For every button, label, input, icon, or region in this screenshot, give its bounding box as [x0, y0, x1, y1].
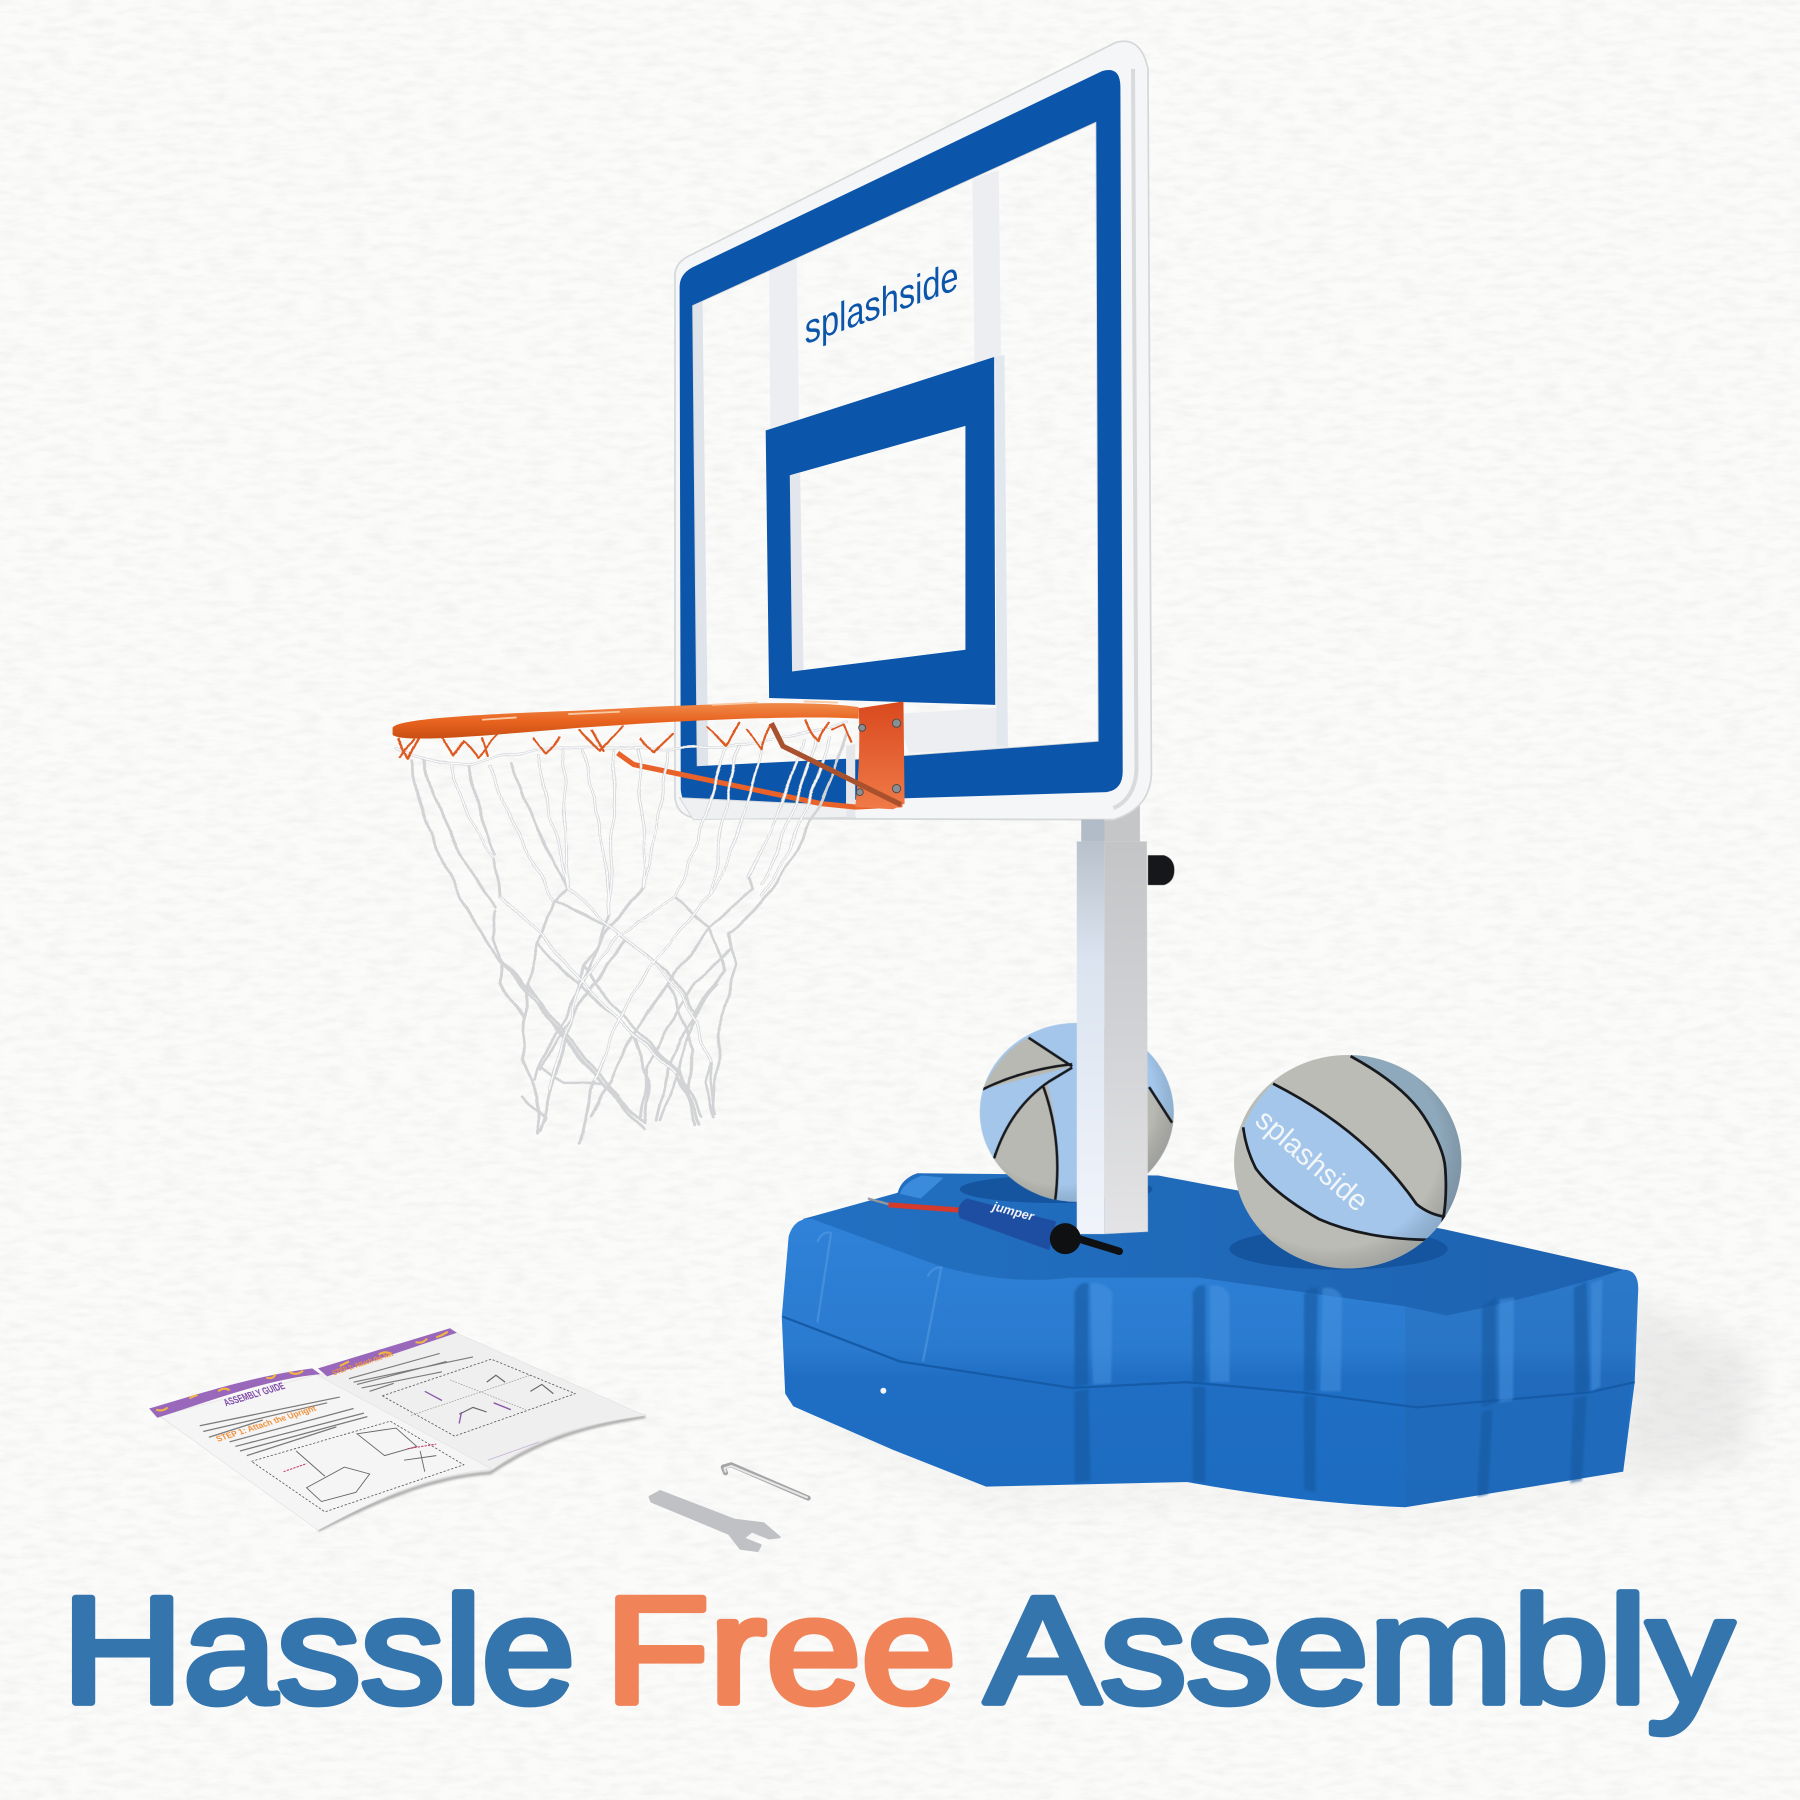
pump needle — [868, 1198, 889, 1204]
title word: Assembly: Assembly — [985, 1566, 1734, 1735]
adjustment knob — [1148, 855, 1174, 885]
pump barrel — [958, 1198, 1056, 1250]
right page diagrams — [382, 1359, 575, 1436]
water tank base — [782, 1173, 1638, 1507]
ball holes — [960, 1176, 1153, 1203]
air pump — [868, 1198, 1119, 1254]
ball side panel — [1352, 1055, 1462, 1218]
base front body — [782, 1219, 1638, 1507]
hoop rim — [393, 701, 859, 739]
title word: Hassle: Hassle — [62, 1566, 575, 1735]
band squiggles — [156, 1332, 448, 1410]
support pole — [1077, 820, 1174, 1234]
pole tube shade — [1081, 820, 1104, 841]
ball seams — [983, 1038, 1172, 1202]
wrench tool — [650, 1491, 779, 1551]
back corner highlight — [900, 1176, 944, 1198]
bracket bolts — [856, 719, 901, 796]
left page — [149, 1374, 492, 1530]
front basketball — [1228, 1050, 1469, 1274]
purple band — [149, 1328, 457, 1418]
right page text lines — [349, 1353, 473, 1391]
base ribs light — [1091, 1279, 1603, 1403]
lower brace — [618, 753, 902, 807]
base top surface — [802, 1173, 1637, 1332]
back basketball — [980, 1022, 1174, 1202]
net strings highlight — [396, 722, 847, 1090]
title word: Free: Free — [605, 1566, 956, 1735]
backboard — [675, 41, 1151, 820]
net hooks — [398, 722, 851, 758]
step diagram — [251, 1421, 464, 1512]
backboard frame highlight — [1114, 69, 1136, 808]
ball seams — [1243, 1056, 1446, 1250]
ball logo: splashside — [1249, 1103, 1375, 1218]
upper brace — [771, 723, 901, 805]
pump handle — [1050, 1223, 1081, 1254]
pole right face — [1104, 841, 1148, 1234]
assembly booklet — [149, 1328, 645, 1530]
lower plate behind hoop — [680, 744, 855, 820]
base seam — [783, 1317, 1635, 1407]
blue target square — [766, 357, 995, 705]
left ribs — [817, 1233, 941, 1361]
hoop bracket — [855, 701, 905, 809]
base shadow — [804, 1297, 1756, 1515]
pole left face — [1077, 841, 1104, 1234]
left page text lines — [200, 1397, 367, 1456]
backboard struts — [692, 170, 1008, 771]
right page — [313, 1333, 645, 1469]
hoop net — [396, 722, 851, 1143]
booklet heading: ASSEMBLY GUIDE — [222, 1381, 288, 1409]
hex key tool — [723, 1465, 808, 1498]
booklet shadow — [318, 1417, 645, 1530]
backboard frame edge — [675, 41, 1151, 820]
title — [62, 1566, 1734, 1735]
backboard logo: splashside — [805, 252, 959, 354]
net strings shadow — [396, 722, 847, 1143]
right page step heading: STEP 2: Attach the Net — [331, 1351, 395, 1377]
rim highlights — [482, 701, 838, 720]
ball blue panel — [1243, 1084, 1449, 1240]
pump brand: jumper — [989, 1199, 1036, 1224]
base ribs dark — [1074, 1281, 1589, 1497]
base plug — [880, 1388, 886, 1394]
support pole inner tube — [1081, 794, 1140, 841]
pump hose — [889, 1205, 959, 1210]
base right shading — [1405, 1270, 1638, 1507]
step heading: STEP 1: Attach the Upright — [214, 1404, 318, 1444]
ball panels grey — [983, 1038, 1177, 1205]
right page footer — [488, 1442, 540, 1460]
blue outer border — [680, 70, 1123, 805]
